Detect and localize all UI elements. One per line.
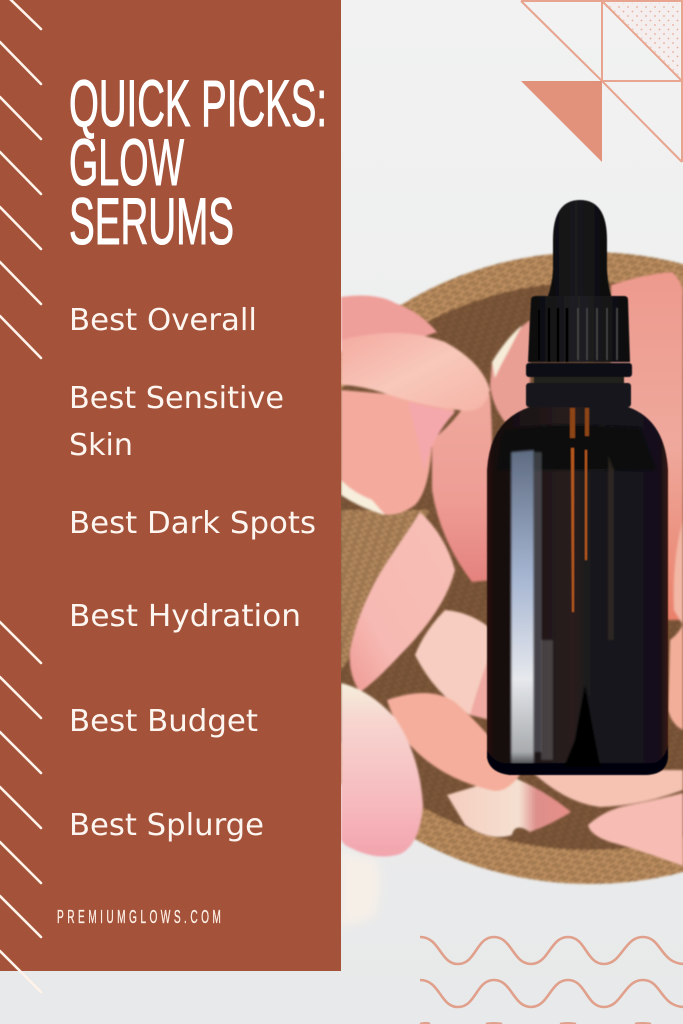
- title: GLOW: [69, 125, 184, 199]
- diagonal stripes: upper group: [0, 0, 41, 358]
- amber glass body: [487, 407, 668, 775]
- wooden plate: [341, 250, 683, 886]
- geometric triangle pattern: [521, 0, 683, 162]
- ribbed cap: [526, 296, 632, 407]
- filled triangle: [521, 81, 602, 162]
- title: [69, 66, 327, 258]
- website url: PREMIUMGLOWS.COM: [57, 907, 221, 928]
- title: QUICK PICKS:: [69, 66, 327, 140]
- pick: best splurge: Best Splurge: [69, 808, 264, 843]
- pick: best budget: Best Budget: [69, 704, 258, 739]
- rose petals: [341, 272, 683, 925]
- diagonal stripes: lower group: [0, 622, 41, 992]
- title: SERUMS: [69, 184, 234, 258]
- list of picks: [69, 303, 316, 843]
- panel: brown list panel: [0, 0, 341, 971]
- serum bottle: [487, 200, 668, 775]
- wave decorations: [420, 937, 683, 1024]
- pick: best sensitive skin: [69, 381, 284, 463]
- pick: best sensitive skin: Skin: [69, 428, 133, 463]
- dropper bulb: [548, 200, 611, 296]
- photo: serum bottle on wooden plate with rose petals: [341, 199, 683, 924]
- pick: best sensitive skin: Best Sensitive: [69, 381, 284, 416]
- pick: best dark spots: Best Dark Spots: [69, 506, 316, 541]
- pick: best overall: Best Overall: [69, 303, 257, 338]
- pick: best hydration: Best Hydration: [69, 599, 301, 634]
